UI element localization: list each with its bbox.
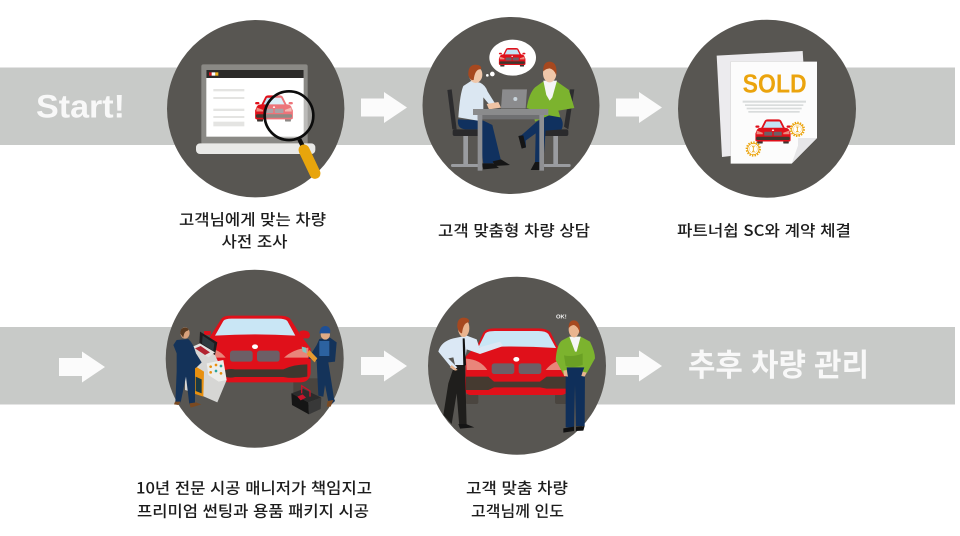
right man [519, 114, 563, 163]
right chair [564, 89, 574, 129]
toolbox [291, 389, 321, 402]
caption 4: 10년 전문 시공 매니저가 책임지고 [136, 476, 372, 498]
arrow 2 [616, 92, 662, 123]
icon: handover of car: OK! [556, 314, 567, 320]
caption 5: 고객님께 인도 [471, 500, 564, 522]
icon: car service with technicians [173, 316, 337, 414]
diagnostic machine [185, 347, 227, 402]
arrow 1 [361, 92, 407, 123]
icon: sold document [717, 51, 817, 164]
caption 1: 고객님에게 맞는 차량 [179, 208, 326, 230]
left man [458, 119, 501, 163]
icon: laptop with magnifier [196, 64, 315, 173]
arrow 5 [616, 350, 662, 382]
step 5: delivery [428, 277, 606, 455]
caption 4 [136, 476, 372, 522]
man right [566, 367, 585, 427]
arrow 4 [361, 350, 407, 382]
icon: two people at a table [447, 40, 574, 171]
step 3: contract [678, 20, 856, 198]
step 2: consultation [422, 17, 600, 194]
start label: Start! [36, 88, 125, 124]
arrow 3 [59, 352, 105, 382]
caption 5 [466, 476, 568, 522]
technician right [308, 338, 337, 407]
band: top row [0, 68, 955, 145]
step 4: installation [166, 270, 344, 448]
icon: sold document: SOLD [743, 68, 807, 98]
technician left [173, 339, 202, 404]
icon: handover of car [438, 314, 595, 433]
caption 4: 프리미엄 썬팅과 용품 패키지 시공 [137, 500, 369, 522]
table [473, 109, 548, 115]
band: bottom row [0, 327, 955, 404]
caption 5: 고객 맞춤 차량 [466, 476, 568, 498]
caption 2: 고객 맞춤형 차량 상담 [438, 219, 590, 241]
caption 1: 사전 조사 [222, 230, 288, 252]
caption 3: 파트너쉽 SC와 계약 체결 [677, 219, 851, 241]
laptop [501, 89, 527, 108]
caption 1 [179, 208, 326, 252]
step 1: laptop research [167, 20, 344, 197]
end label: 추후 차량 관리 [688, 348, 869, 383]
left chair [447, 89, 457, 129]
man left [443, 363, 467, 427]
